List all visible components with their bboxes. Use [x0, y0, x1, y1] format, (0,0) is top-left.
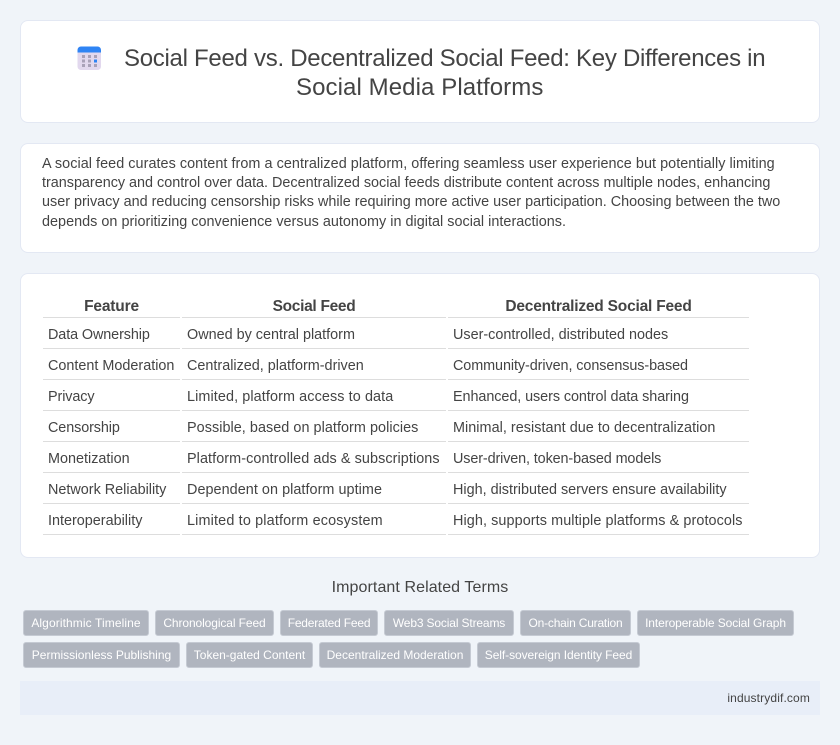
- intro text: transparency and control over data. Decentralized social feeds distribute content across multiple nodes, enhancing: [42, 175, 770, 191]
- comparison table: [43, 298, 749, 535]
- tags: related terms: Chronological Feed: [163, 616, 266, 630]
- title: [124, 45, 765, 101]
- footer bar: [20, 681, 820, 715]
- row: privacy: [43, 389, 749, 411]
- icon: calendar: [78, 46, 101, 70]
- intro text: depends on prioritizing convenience versus autonomy in digital social interactions.: [42, 214, 566, 230]
- row: privacy: Privacy: [48, 389, 94, 405]
- tags: related terms: [23, 610, 794, 668]
- row: data ownership: Owned by central platform: [187, 327, 355, 343]
- row: content moderation: Centralized, platform-driven: [187, 358, 364, 374]
- row: monetization: [43, 451, 749, 473]
- panel: title card: [20, 20, 820, 123]
- table header: Decentralized Social Feed: [505, 298, 692, 315]
- heading: related terms: Important Related Terms: [332, 579, 508, 596]
- table header: Feature: [84, 298, 139, 315]
- row: censorship: Minimal, resistant due to decentralization: [453, 420, 715, 436]
- row: interoperability: [43, 513, 749, 535]
- footer: site name: industrydif.com: [727, 691, 810, 705]
- tags: related terms: On-chain Curation: [528, 616, 622, 630]
- panel: intro card: [20, 143, 820, 253]
- row: data ownership: Data Ownership: [48, 327, 150, 343]
- row: censorship: [43, 420, 749, 442]
- row: interoperability: High, supports multiple platforms & protocols: [453, 513, 743, 529]
- table header: [43, 298, 749, 318]
- tags: related terms: Token-gated Content: [194, 648, 305, 662]
- row: interoperability: Limited to platform ecosystem: [187, 513, 383, 529]
- panel: comparison table card: [20, 273, 820, 558]
- row: network reliability: [43, 482, 749, 504]
- intro text: A social feed curates content from a centralized platform, offering seamless user experience but potentially limiting: [42, 156, 775, 172]
- tags: related terms: Web3 Social Streams: [393, 616, 505, 630]
- row: data ownership: User-controlled, distributed nodes: [453, 327, 668, 343]
- row: network reliability: High, distributed servers ensure availability: [453, 482, 727, 498]
- row: monetization: Platform-controlled ads & subscriptions: [187, 451, 440, 467]
- row: data ownership: [43, 327, 749, 349]
- intro text: user privacy and reducing censorship risks while requiring more active user participation. Choosing between the two: [42, 194, 780, 210]
- row: network reliability: Dependent on platform uptime: [187, 482, 382, 498]
- row: censorship: Censorship: [48, 420, 120, 436]
- row: monetization: User-driven, token-based models: [453, 451, 661, 467]
- tags: related terms: Decentralized Moderation: [327, 648, 463, 662]
- tags: related terms: Interoperable Social Graph: [645, 616, 786, 630]
- row: monetization: Monetization: [48, 451, 130, 467]
- intro text: [42, 156, 780, 230]
- table header: Social Feed: [273, 298, 355, 315]
- tags: related terms: Self-sovereign Identity Feed: [485, 648, 632, 662]
- row: content moderation: [43, 358, 749, 380]
- row: network reliability: Network Reliability: [48, 482, 166, 498]
- title line 2: Social Media Platforms: [296, 74, 543, 101]
- tags: related terms: Algorithmic Timeline: [31, 616, 141, 630]
- row: content moderation: Content Moderation: [48, 358, 174, 374]
- row: privacy: Enhanced, users control data sharing: [453, 389, 689, 405]
- title line 1: Social Feed vs. Decentralized Social Feed: Key Differences in: [124, 45, 765, 72]
- row: interoperability: Interoperability: [48, 513, 142, 529]
- row: censorship: Possible, based on platform policies: [187, 420, 418, 436]
- tags: related terms: Federated Feed: [288, 616, 370, 630]
- tags: related terms: Permissionless Publishing: [32, 648, 171, 662]
- row: content moderation: Community-driven, consensus-based: [453, 358, 688, 374]
- row: privacy: Limited, platform access to data: [187, 389, 393, 405]
